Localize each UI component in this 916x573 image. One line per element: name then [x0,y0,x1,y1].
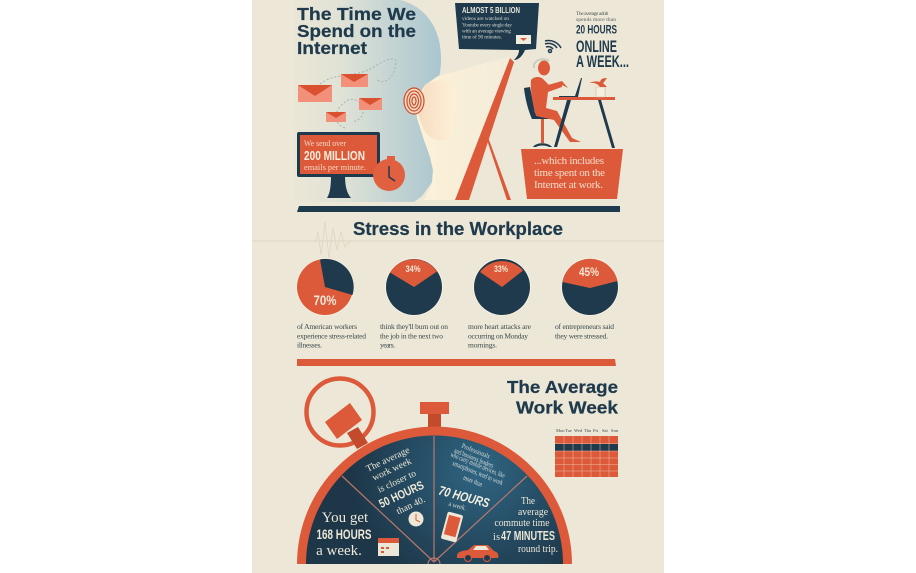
icon: wifi [545,41,561,52]
wedge: 70 hours: and business leaders [453,447,495,470]
pie captions: mornings. [468,340,497,350]
heading: The Average [507,377,618,397]
stat: 20 hours online [576,11,629,71]
icons: envelopes [298,74,382,122]
weekly calendar grid: Mon [556,428,565,433]
stat: 20 hours online: spends more than [576,17,616,23]
wedge: 70 hours: more than [462,474,484,489]
monitor callout: 200 MILLION [304,148,365,163]
stopwatch dial [297,378,572,564]
wedge: 168 hours: 168 HOURS [316,527,372,542]
wedge: 168 hours: a week. [316,543,362,559]
wedge: 168 hours: You get [322,510,369,526]
divider bar [297,359,616,366]
dial dividers [342,436,527,564]
pie captions: more heart attacks are [468,322,532,331]
pie captions: the job in the next two [380,332,443,340]
pie 45 percent [561,258,619,316]
speech bubble: Youtube every single day [462,22,512,28]
pie captions: illnesses. [297,340,322,350]
desk [553,78,615,148]
chair [524,87,553,119]
pie 34 percent: 34% [406,264,420,274]
weekly calendar grid: Tue [565,428,572,433]
pie captions [297,322,614,350]
pie 45 percent: 45% [579,265,599,279]
weekly calendar grid [555,428,619,477]
icon: phone [441,511,463,543]
weekly calendar grid: Thu [584,428,592,433]
speech bubble: time of 90 minutes. [462,34,503,40]
dial face [306,435,563,564]
wedge: 70 hours [437,442,506,512]
wedge: commute [493,496,558,555]
wedge: 50 hours: than 40. [395,495,427,517]
pie captions: years. [380,340,395,350]
callout box: at work: ...which includes [534,155,604,167]
pie captions: of American workers [297,322,357,331]
wedge: 50 hours: 50 HOURS [377,478,426,511]
pie captions: they were stressed. [555,332,608,340]
heading: Work Week [516,398,618,418]
wedge: commute: round trip. [518,544,558,555]
background panel [252,0,664,573]
weekly calendar grid: Sat [602,428,608,433]
ring handle [306,378,374,446]
light beam from screen [416,56,512,200]
plant [596,87,605,97]
wedge: 50 hours [365,446,427,517]
speech bubble [455,3,539,60]
pie captions: think they'll burn out on [380,322,448,331]
panel: average work week [297,377,619,564]
pie 34 percent [385,258,443,316]
wedge: commute: The [521,496,536,507]
pie captions: of entrepreneurs said [555,322,614,331]
weekly calendar grid: Fri [593,428,599,433]
face profile [417,80,456,140]
wedge: commute: average [518,507,549,518]
wedge: 70 hours: smartphones, tend to work [451,459,505,487]
title: The Time We [297,4,416,24]
title [297,4,416,58]
stress pulse line [315,222,350,258]
callout box: at work: Internet at work. [534,179,603,191]
screen stand [455,58,514,200]
top crown [420,402,449,430]
title: Internet [297,38,367,58]
body [531,77,581,142]
icon: car [457,545,498,562]
wedge: 70 hours: a week. [448,500,467,512]
panel: stress in the workplace [252,218,664,366]
icon: fingerprint ear [404,88,424,114]
heading [507,377,618,418]
head silhouette [290,0,441,202]
title: Spend on the [297,21,416,41]
wedge: 70 hours: Professionals [460,442,491,461]
speech bubble: with an average viewing [462,28,511,34]
stat: 20 hours online: ONLINE [576,38,617,56]
pie 33 percent: 33% [494,264,508,274]
wedge: 50 hours: The average [365,446,411,475]
wedge: commute: is [493,532,500,543]
stat: 20 hours online: A WEEK... [576,53,629,71]
wedge: commute: commute time [494,518,550,529]
wedge: 50 hours: work week [371,457,413,484]
pie captions: experience stress-related [297,332,366,340]
icon: stopwatch [373,156,405,191]
stat: 20 hours online: The average adult [576,11,608,17]
panel: internet time [290,0,629,212]
icon: clock [408,512,424,526]
wedge: 168 hours [316,510,372,559]
divider bar [297,206,620,212]
wedge: 70 hours: 70 HOURS [437,483,491,511]
icon: video thumbnail [516,35,531,44]
pie 70 percent [296,258,354,316]
pie 70 percent: 70% [314,292,337,308]
side button [325,403,368,449]
weekly calendar grid: Wed [574,428,583,433]
laptop [559,78,582,97]
wedge: 50 hours: is closer to [376,469,418,495]
callout box: at work: time spent on the [534,167,605,179]
pie captions: occurring on Monday [468,332,528,340]
head [538,60,550,76]
pie 33 percent [473,258,531,316]
weekly calendar grid: Sun [611,428,619,433]
monitor callout: We send over [304,139,346,148]
monitor callout: emails per minute. [304,163,366,172]
outer case [297,427,572,564]
person at desk [524,59,581,147]
speech bubble: videos are watched on [462,16,509,22]
heading: Stress in the Workplace [353,218,563,239]
wedge: 70 hours: who carry mobile devices, like [449,451,506,480]
monitor callout [297,132,380,198]
icon: calendar [378,538,399,556]
callout box: at work [521,149,623,199]
wedge: commute: 47 MINUTES [501,529,555,543]
stat: 20 hours online: 20 HOURS [576,24,617,36]
dotted email path [320,59,396,128]
speech bubble: ALMOST 5 BILLION [462,6,520,15]
